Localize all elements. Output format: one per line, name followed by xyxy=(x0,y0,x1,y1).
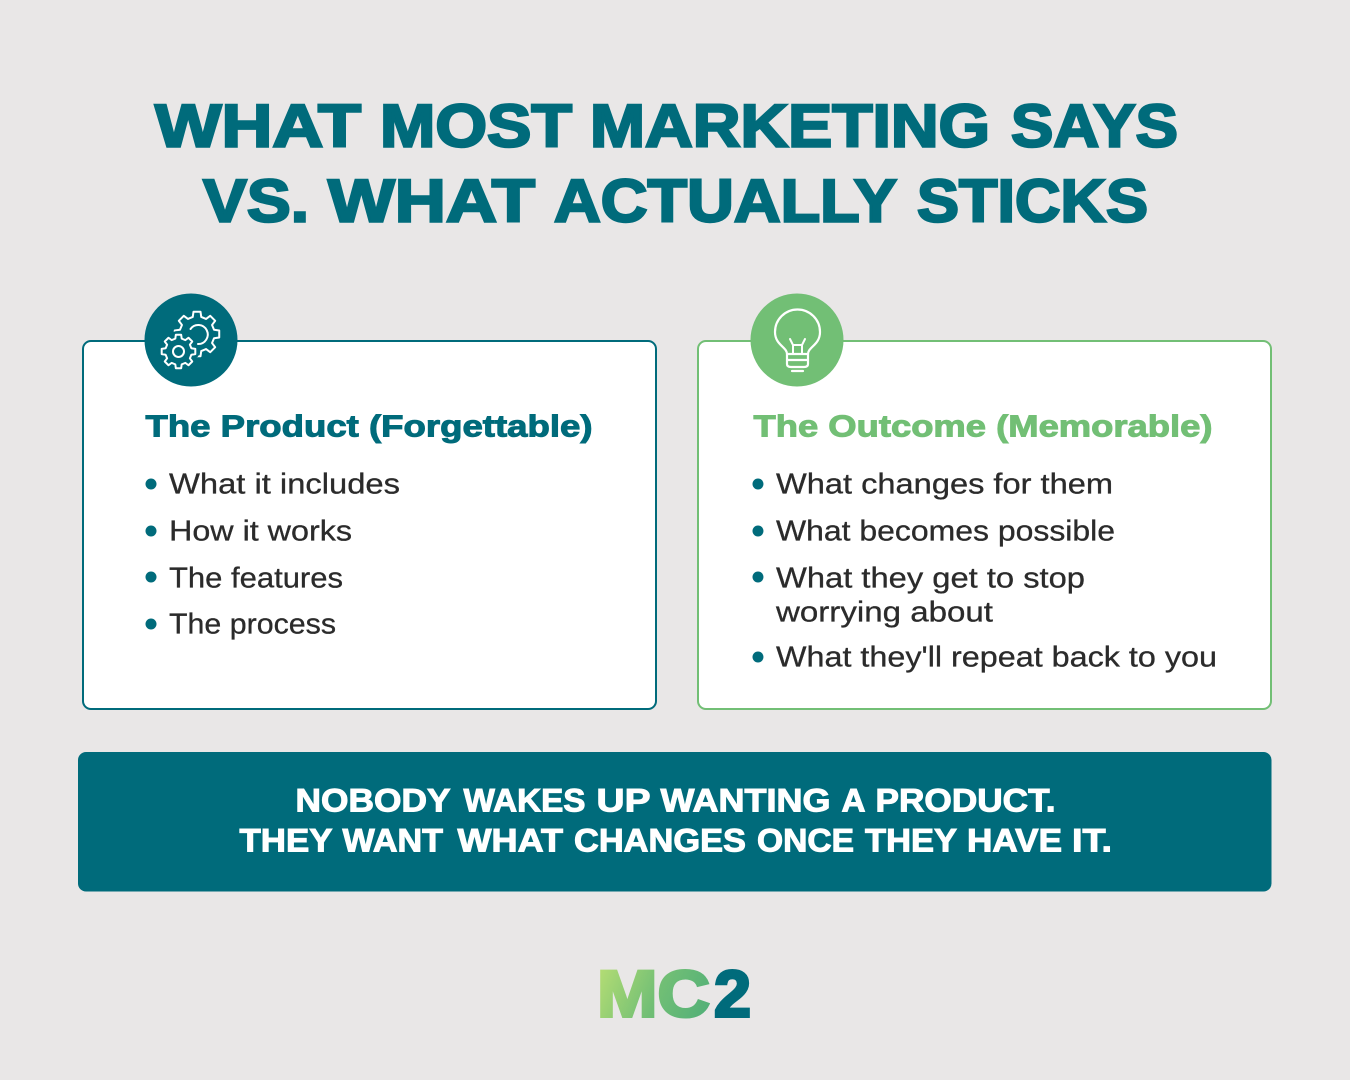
panel: the outcome xyxy=(698,294,1271,709)
icon: light bulb xyxy=(750,294,844,386)
list: outcome items: What changes for them xyxy=(776,468,1113,500)
logo: MC2 xyxy=(597,956,751,1030)
callout banner: WANT xyxy=(342,822,443,858)
callout banner: NOBODY xyxy=(296,782,450,818)
panel frame: product xyxy=(83,341,656,709)
callout banner: UP xyxy=(596,782,650,818)
callout banner: WAKES xyxy=(464,782,586,818)
logo: MC2: 2 xyxy=(714,956,751,1030)
list: outcome items: What they get to stop xyxy=(776,562,1085,594)
list: product items: The process xyxy=(169,608,336,640)
list: product items: The features xyxy=(169,562,343,594)
list: outcome items: worrying about xyxy=(775,596,993,628)
title: ACTUALLY xyxy=(554,168,897,234)
list: product items xyxy=(146,468,400,640)
heading: the product: The Product (Forgettable) xyxy=(146,408,592,443)
callout banner: THEY xyxy=(865,822,957,858)
callout banner: WHAT xyxy=(458,822,564,858)
callout banner: ONCE xyxy=(757,822,854,858)
icon: gears xyxy=(144,294,238,386)
callout banner: CHANGES xyxy=(574,822,746,858)
logo: MC2: MC xyxy=(597,956,710,1030)
callout banner: WANTING xyxy=(660,782,830,818)
list: outcome items xyxy=(752,468,1217,673)
panel frame: outcome xyxy=(698,341,1271,709)
callout banner: PRODUCT. xyxy=(876,782,1056,818)
callout banner: IT. xyxy=(1072,822,1112,858)
list: outcome items: What they'll repeat back to you xyxy=(776,641,1217,673)
title: WHAT xyxy=(155,92,361,160)
title xyxy=(155,92,1178,234)
title: WHAT xyxy=(328,168,535,234)
title: MARKETING xyxy=(590,92,990,160)
list: product items: What it includes xyxy=(169,468,400,500)
heading: the outcome: The Outcome (Memorable) xyxy=(754,408,1212,443)
list: outcome items: What becomes possible xyxy=(776,515,1115,547)
panel: the product xyxy=(83,294,656,709)
callout banner: HAVE xyxy=(967,822,1062,858)
callout banner: THEY xyxy=(240,822,332,858)
title: SAYS xyxy=(1011,92,1178,160)
title: STICKS xyxy=(917,168,1148,234)
title: VS. xyxy=(203,168,309,234)
callout banner xyxy=(78,752,1272,892)
list: product items: How it works xyxy=(169,515,352,547)
callout banner: A xyxy=(842,782,866,818)
title: MOST xyxy=(380,92,572,160)
